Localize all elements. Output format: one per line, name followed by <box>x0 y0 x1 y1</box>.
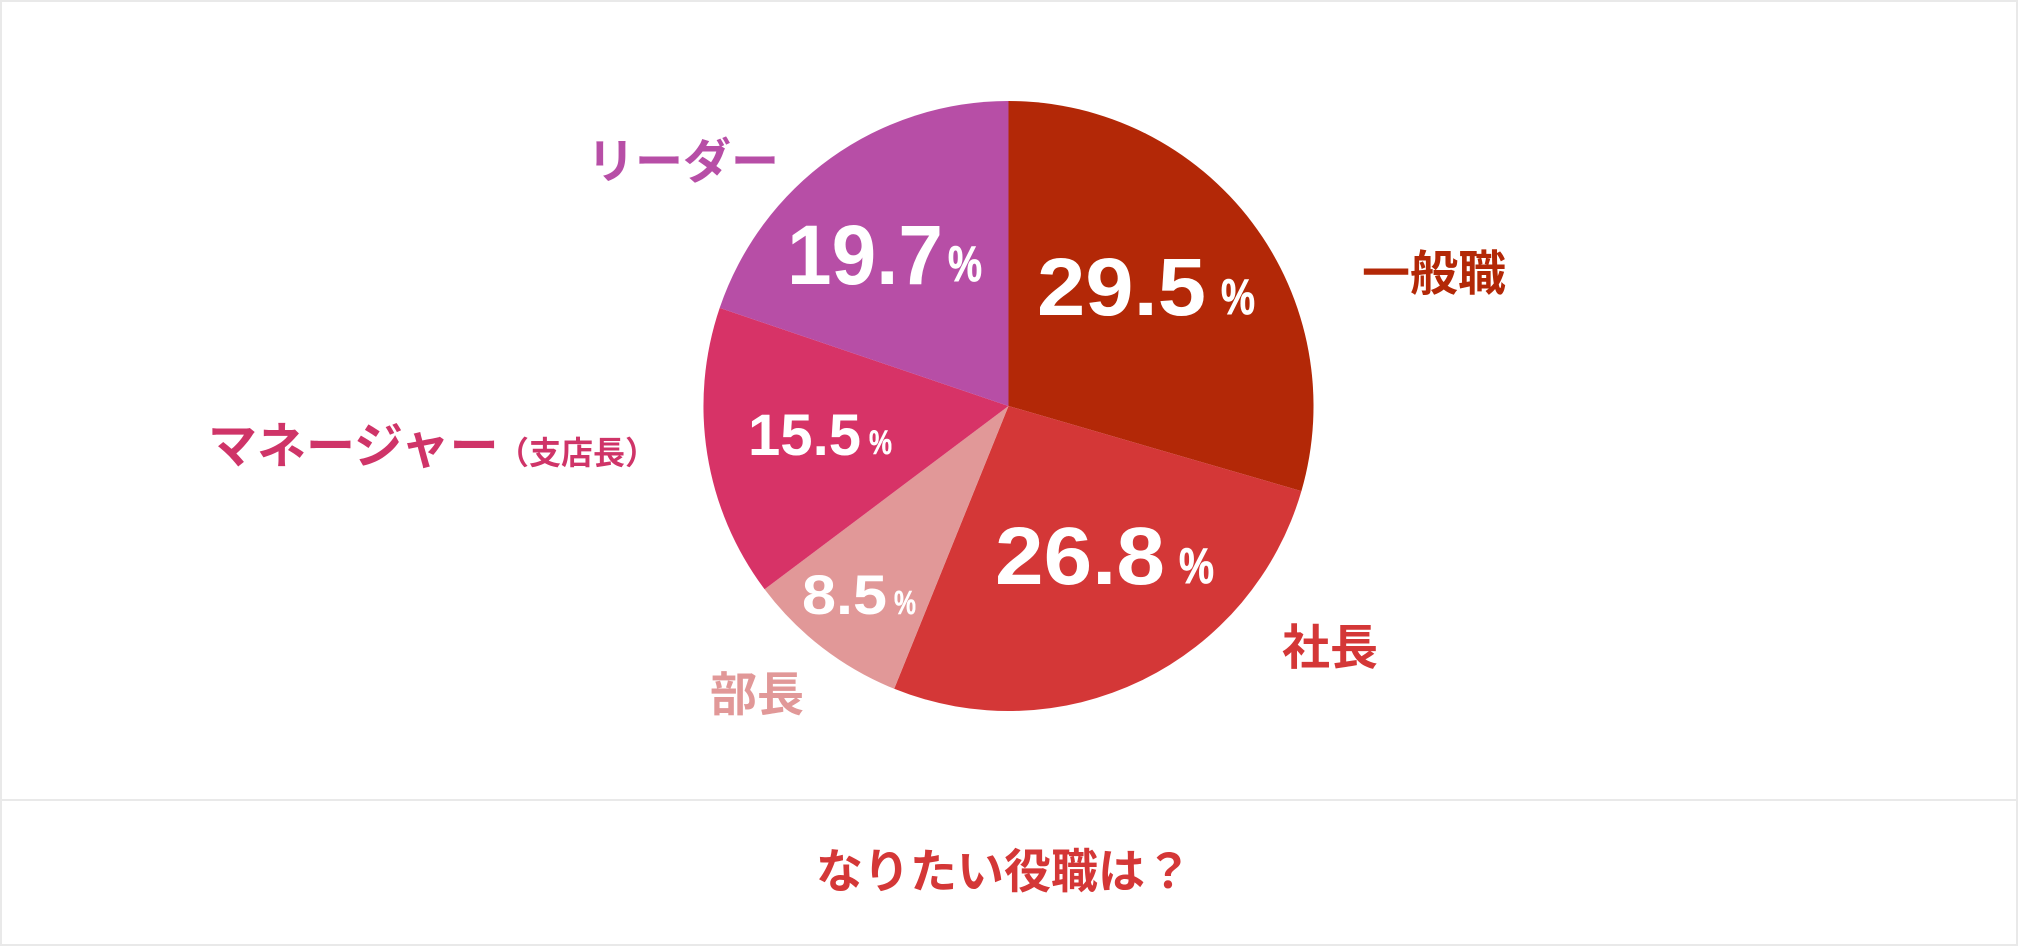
slice: リーダー 19.7% <box>720 101 1008 406</box>
value: 26.8%: % <box>1179 538 1214 594</box>
slice: 社長 26.8% <box>894 406 1301 711</box>
label: 部長: 部長 <box>710 668 804 721</box>
title: なりたい役職は？ <box>816 845 1192 898</box>
label: マネージャー（支店長）: マネージャー <box>208 420 499 474</box>
value: 19.7%: % <box>948 236 982 292</box>
label: マネージャー（支店長）: （支店長） <box>497 435 657 471</box>
value: 8.5%: % <box>894 584 916 621</box>
slice: 部長 8.5% <box>765 406 1008 689</box>
value: 8.5% <box>802 563 916 626</box>
value: 15.5%: 15.5 <box>748 403 861 468</box>
value: 29.5%: 29.5 <box>1037 242 1206 333</box>
value: 29.5%: % <box>1221 269 1255 325</box>
label: リーダー: リーダー <box>587 136 779 189</box>
label: マネージャー（支店長） <box>208 420 657 474</box>
slice: マネージャー 15.5% <box>703 308 1008 589</box>
slice: 一般職 29.5% <box>1008 101 1314 491</box>
label: 一般職: 一般職 <box>1362 248 1506 301</box>
value: 15.5%: % <box>869 424 892 462</box>
label: 社長: 社長 <box>1282 622 1378 675</box>
pie chart <box>703 101 1314 711</box>
value: 19.7%: 19.7 <box>787 208 943 302</box>
value: 26.8%: 26.8 <box>995 511 1165 602</box>
value: 8.5%: 8.5 <box>802 563 887 626</box>
